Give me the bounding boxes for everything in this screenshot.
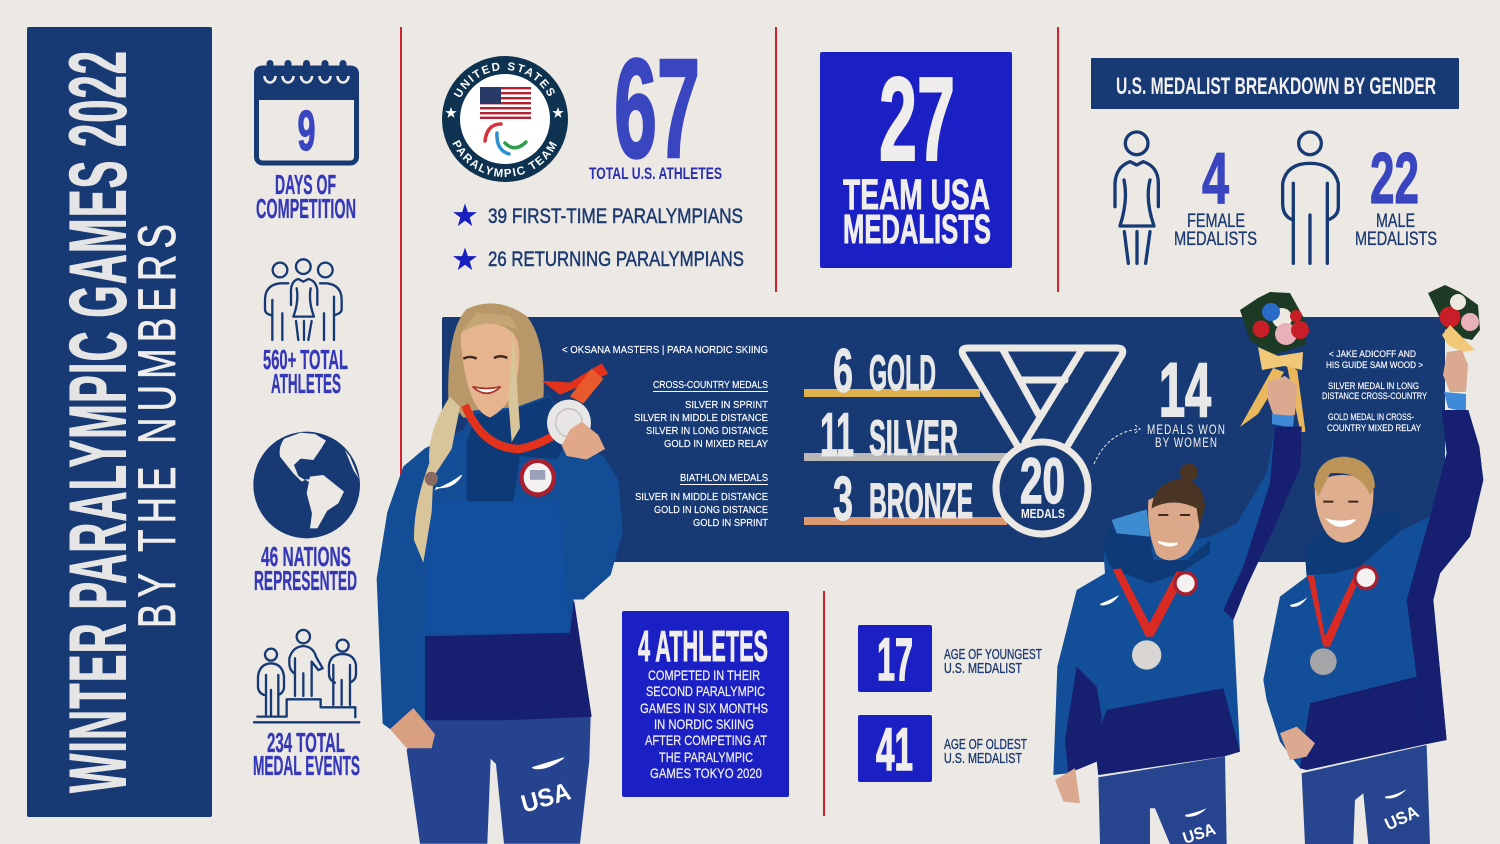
figure: USA <box>1382 801 1422 834</box>
stat: oldest medalist: 41 <box>876 716 913 783</box>
stat: male medalists: 22 <box>1370 139 1419 219</box>
text: returning Paralympians: 26 RETURNING PARALYMPIANS <box>488 247 744 271</box>
medal tally: gold <box>804 337 980 406</box>
stat: female medalists: 4 <box>1202 139 1229 219</box>
icon: male figure <box>1283 132 1338 263</box>
arm and hand <box>1268 376 1297 428</box>
stat: male medalists: MEDALISTS <box>1355 229 1437 250</box>
icon: star <box>453 248 477 270</box>
stat: youngest medalist: 17 <box>877 626 913 693</box>
stat: male medalists <box>1355 139 1437 250</box>
medal tally: bronze: 3 <box>833 465 853 534</box>
figure <box>1053 427 1302 844</box>
medal tally: silver: 11 <box>820 401 854 470</box>
text: MEDAL EVENTS <box>253 750 360 781</box>
label: DAYS OF <box>275 169 336 200</box>
medal tally: silver <box>804 401 1007 470</box>
panel: 4 athletes callout: AFTER COMPETING AT <box>645 732 767 748</box>
icon: medal with ribbon and total: 20 <box>1020 445 1065 517</box>
subtitle: BY THE NUMBERS <box>128 218 187 628</box>
medal tally: bronze <box>804 465 1007 534</box>
panel: 4 athletes callout: GAMES IN SIX MONTHS <box>640 700 768 716</box>
medal tally: gold: GOLD <box>869 345 936 401</box>
label <box>263 344 348 399</box>
panel: 4 athletes callout: GAMES TOKYO 2020 <box>650 765 762 781</box>
arm and hand <box>1443 350 1468 412</box>
figure <box>1263 410 1483 844</box>
text: Jake Adicoff and Sam Wood medals: GOLD MEDAL IN CROSS- <box>1328 412 1414 423</box>
panel: 4 athletes callout: SECOND PARALYMPIC <box>646 683 765 699</box>
panel: Team USA medalists <box>820 52 1012 268</box>
stat: medal events <box>253 630 360 781</box>
label: total athletes: TOTAL U.S. ATHLETES <box>589 165 722 183</box>
text: Oksana Masters medals: CROSS-COUNTRY MEDALS <box>653 379 768 391</box>
text: Jake Adicoff and Sam Wood medals: HIS GUIDE SAM WOOD > <box>1326 360 1423 371</box>
stat: nations represented <box>253 432 360 596</box>
panel: 4 athletes callout <box>622 611 789 797</box>
medal tally: gold: 6 <box>833 337 853 406</box>
stat: oldest medalist <box>858 715 1027 783</box>
stat: medals won by women: MEDALS WON <box>1147 422 1226 437</box>
stat: medals won by women: BY WOMEN <box>1155 435 1218 450</box>
stat: female medalists: MEDALISTS <box>1174 229 1257 250</box>
text: Oksana Masters medals: GOLD IN SPRINT <box>693 517 769 529</box>
text: Oksana Masters medals: GOLD IN LONG DISTANCE <box>654 504 768 516</box>
athlete: Oksana Masters: USA <box>518 778 574 819</box>
panel: U.S. team size <box>442 29 744 271</box>
label: 46 NATIONS <box>261 541 351 572</box>
text: Oksana Masters medals: SILVER IN MIDDLE DISTANCE <box>635 491 768 503</box>
heading <box>1091 58 1459 109</box>
panel: 4 athletes callout: 4 ATHLETES <box>638 622 768 671</box>
stat: youngest medalist: AGE OF YOUNGEST <box>944 647 1042 663</box>
label: ATHLETES <box>271 368 341 399</box>
text: Oksana Masters medals <box>562 344 769 529</box>
stat: male medalists: MALE <box>1376 211 1415 232</box>
text: Oksana Masters medals: SILVER IN MIDDLE DISTANCE <box>634 412 768 424</box>
athlete: Oksana Masters <box>377 303 623 844</box>
stat: youngest medalist: U.S. MEDALIST <box>944 661 1022 677</box>
text: Oksana Masters medals: GOLD IN MIXED RELAY <box>664 438 768 450</box>
label: 560+ TOTAL <box>263 344 348 375</box>
label <box>256 169 356 224</box>
panel: Team USA medalists: MEDALISTS <box>843 206 991 252</box>
icon: female figure <box>1115 132 1158 263</box>
icon: United States Paralympic Team logo: PARALYMPIC TEAM <box>452 140 557 178</box>
label <box>254 541 357 596</box>
stat: total athletes <box>263 259 348 399</box>
icon: calendar: 9 <box>298 99 316 163</box>
athlete: Jake Adicoff <box>1053 292 1309 844</box>
panel: medal summary <box>442 317 1445 562</box>
text: Oksana Masters medals: SILVER IN SPRINT <box>685 399 769 411</box>
label: 234 TOTAL <box>267 727 345 758</box>
stat: female medalists <box>1174 139 1257 250</box>
label: COMPETITION <box>256 193 356 224</box>
panel: 4 athletes callout: THE PARALYMPIC <box>659 749 753 765</box>
bouquet <box>1428 285 1480 352</box>
stat: days of competition <box>254 60 359 224</box>
text: Jake Adicoff and Sam Wood medals: SILVER MEDAL IN LONG <box>1328 381 1419 392</box>
arrow: dashed pointer to medals won by women <box>1094 425 1140 464</box>
panel: 4 athletes callout: COMPETED IN THEIR <box>648 667 760 683</box>
icon: calendar <box>254 60 359 163</box>
icon: star <box>453 204 477 226</box>
text: Oksana Masters medals: < OKSANA MASTERS | PARA NORDIC SKIING <box>562 344 768 356</box>
panel: Team USA medalists: 27 <box>879 53 955 186</box>
big number: 67: 67 <box>614 29 700 187</box>
stat: female medalists: FEMALE <box>1187 211 1245 232</box>
icon: group of athletes <box>265 259 342 340</box>
icon: United States Paralympic Team logo <box>442 56 568 182</box>
panel: Team USA medalists: TEAM USA <box>843 171 990 219</box>
text: Jake Adicoff and Sam Wood medals: DISTANCE CROSS-COUNTRY <box>1322 391 1428 402</box>
panel: 4 athletes callout: IN NORDIC SKIING <box>654 716 754 732</box>
icon: podium <box>254 630 359 722</box>
icon: United States Paralympic Team logo: UNITED STATES <box>454 62 555 97</box>
medal tally: bronze: BRONZE <box>869 473 973 529</box>
stat: medals won by women: 14 <box>1159 348 1211 433</box>
stat: oldest medalist: U.S. MEDALIST <box>944 751 1022 767</box>
athlete: Sam Wood <box>1263 285 1483 844</box>
label <box>253 727 360 781</box>
panel: title sidebar <box>27 27 212 817</box>
text: Jake Adicoff and Sam Wood medals <box>1322 349 1428 434</box>
stat: nations represented: REPRESENTED <box>254 565 357 596</box>
icon: medal with ribbon and total <box>962 348 1123 534</box>
medal tally: silver: SILVER <box>869 410 958 466</box>
text: Oksana Masters medals: BIATHLON MEDALS <box>680 472 768 484</box>
stat: youngest medalist <box>858 625 1042 693</box>
text: first-time Paralympians: 39 FIRST-TIME PARALYMPIANS <box>488 204 743 228</box>
text: Oksana Masters medals: SILVER IN LONG DISTANCE <box>646 425 768 437</box>
panel: medalist breakdown by gender <box>1091 58 1459 263</box>
bouquet <box>1240 292 1309 432</box>
icon: medal with ribbon and total: MEDALS <box>1021 506 1065 521</box>
stat: oldest medalist: AGE OF OLDEST <box>944 737 1027 753</box>
stat: medals won by women <box>1147 348 1226 450</box>
icon: globe <box>253 432 360 538</box>
text: Jake Adicoff and Sam Wood medals: COUNTRY MIXED RELAY <box>1327 423 1422 434</box>
text: Jake Adicoff and Sam Wood medals: < JAKE ADICOFF AND <box>1329 349 1416 360</box>
